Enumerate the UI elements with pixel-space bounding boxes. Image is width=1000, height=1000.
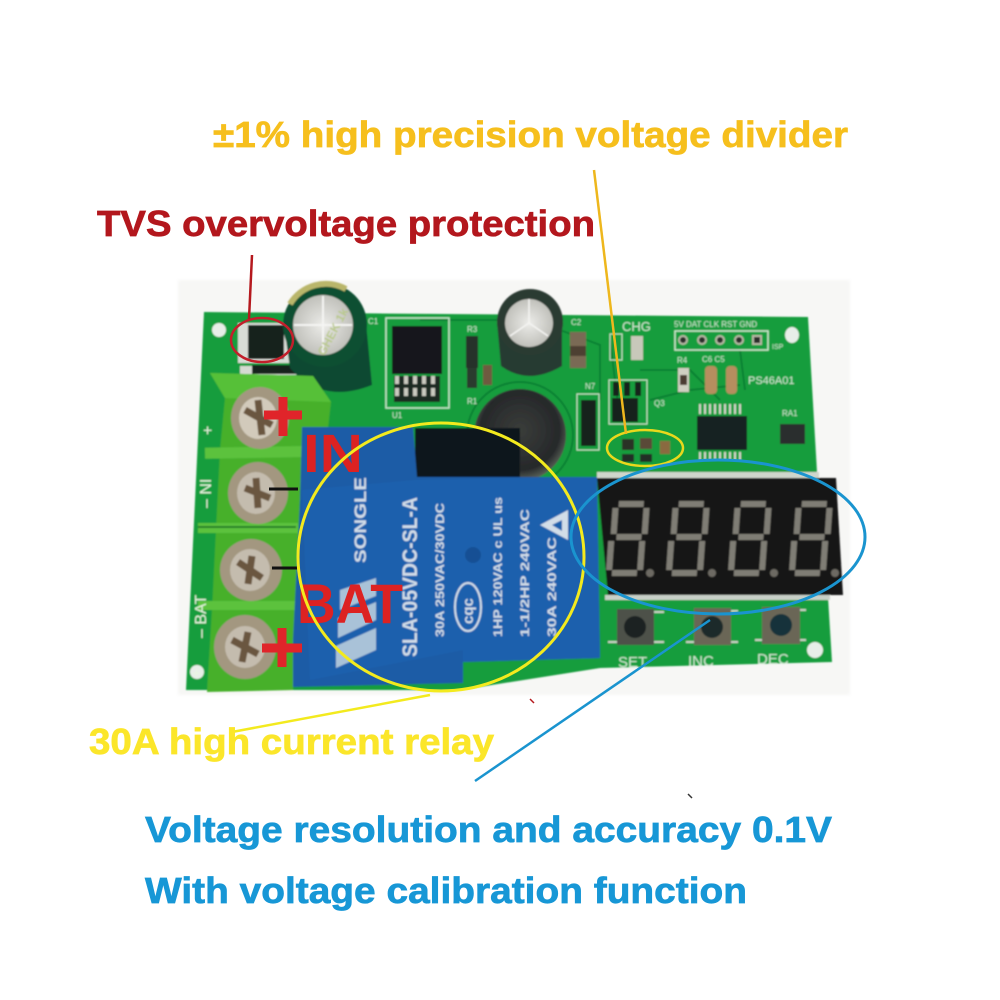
stray speck: dark [688, 794, 692, 798]
relay label model: SLA-05VDC-SL-A [399, 497, 422, 657]
cqc mark [455, 583, 481, 631]
ISP header [675, 331, 768, 350]
callout line: display and buttons [475, 620, 710, 781]
silk labels: PS46A01 [748, 375, 794, 387]
silk labels: SET [618, 654, 647, 671]
marker: plus bottom [262, 628, 302, 667]
terminal block: – NI [198, 479, 215, 508]
silk labels: 5V DAT CLK RST GND [674, 320, 757, 329]
D3 black part [415, 428, 520, 480]
terminal block: + [189, 669, 206, 678]
digit 4 [792, 504, 830, 573]
SONGLE logo [336, 578, 376, 668]
digit 1 [609, 504, 647, 573]
screw 1 [231, 387, 289, 449]
cap and parts right [570, 332, 805, 450]
callout line: TVS [249, 255, 252, 319]
marker: IN label: IN [303, 424, 363, 484]
heading: voltage resolution: Voltage resolution and accuracy 0.1V [145, 809, 832, 850]
push buttons [608, 607, 806, 645]
SET button [608, 609, 664, 645]
PCB traces [420, 320, 745, 488]
capacitor C1 [283, 283, 372, 392]
screw 4 [214, 615, 276, 679]
inductor [474, 389, 566, 481]
microcontroller [697, 404, 747, 460]
silk labels: C2 [571, 318, 582, 327]
silk labels: Q3 [654, 399, 665, 408]
silk labels: N7 [585, 382, 596, 391]
capacitor C1: GHEK 1k [315, 306, 351, 358]
callout ellipse: voltage divider [607, 430, 683, 466]
screw 2 [228, 462, 288, 524]
callout ellipse: TVS [231, 318, 293, 362]
terminal block [189, 373, 331, 692]
screw terminals [214, 387, 289, 679]
mounting holes [190, 323, 823, 679]
silk labels: ISP [772, 344, 784, 351]
silk labels: C6 C5 [702, 355, 725, 364]
screw 3 [220, 539, 282, 601]
relay rating 2: 1HP 120VAC c UL us [491, 497, 505, 637]
relay rating 3: 1-1/2HP 240VAC [518, 509, 532, 637]
silk labels: R4 [677, 356, 688, 365]
callout ellipse: relay [298, 423, 584, 691]
triangle mark [540, 510, 568, 540]
callout line: relay [232, 695, 430, 732]
small SMD parts left [466, 336, 492, 388]
marker: minus bottom [272, 566, 297, 570]
heading: calibration: With voltage calibration function [145, 870, 747, 911]
marker: BAT label: BAT [297, 572, 403, 635]
silk labels: CHG [622, 319, 651, 334]
photo backdrop [178, 280, 850, 695]
relay rating 1: 30A 250VAC/30VDC [433, 503, 447, 637]
callout ellipse: display [571, 460, 865, 614]
relay body [293, 427, 600, 687]
relay hole [465, 547, 481, 563]
digit 3 [731, 504, 769, 573]
silk labels: C1 [368, 317, 379, 326]
PCB [186, 312, 832, 690]
cqc mark: cqc [460, 598, 477, 624]
heading: voltage divider: ±1% high precision voltage divider [213, 114, 848, 155]
marker: minus top [269, 488, 298, 490]
capacitor C2 [497, 289, 563, 376]
divider resistors [622, 438, 670, 462]
silk labels: INC [688, 653, 714, 670]
silk labels: RA1 [782, 409, 798, 418]
heading: TVS overvoltage protection: TVS overvoltage protection [97, 203, 595, 244]
silk labels: R1 [467, 397, 478, 406]
silk labels [368, 317, 798, 671]
callout line: voltage divider [594, 170, 626, 434]
stray speck: red [530, 699, 534, 703]
terminal block: + [200, 426, 217, 435]
silk labels: DEC [757, 651, 789, 668]
circuit board photo [186, 283, 843, 692]
silk labels: D3 [426, 436, 437, 445]
TVS diode [238, 323, 312, 375]
digit 2 [669, 504, 707, 573]
relay label SONGLE: SONGLE [351, 477, 370, 563]
regulator U1 [386, 318, 449, 408]
display [597, 472, 843, 600]
silk labels: R3 [467, 325, 478, 334]
INC button [686, 608, 738, 645]
silk labels: U1 [392, 411, 403, 420]
marker: plus top [264, 397, 302, 436]
terminal block: – BAT [193, 594, 210, 638]
relay rating 4: 30A 240VAC [545, 537, 559, 637]
DEC button [755, 607, 806, 644]
heading: relay: 30A high current relay [89, 721, 494, 762]
